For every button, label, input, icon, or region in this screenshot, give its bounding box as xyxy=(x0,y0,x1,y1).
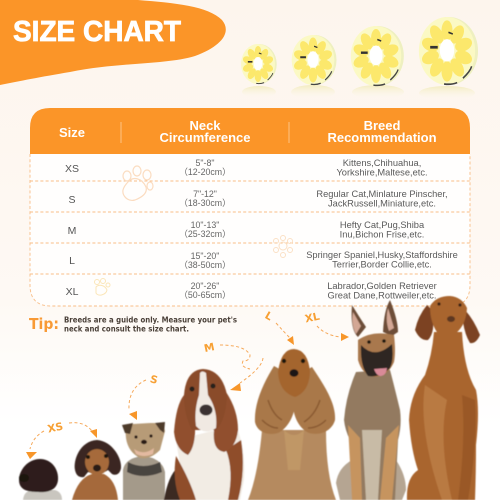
tip note xyxy=(29,315,237,334)
pointer XL xyxy=(304,311,349,341)
row S: Regular Cat,Minlature Pinscher, xyxy=(316,189,448,199)
dog: shepherd XL xyxy=(336,300,406,500)
row XS: （12-20cm） xyxy=(179,167,231,177)
row XL: 20"-26" xyxy=(191,281,219,291)
row M: M xyxy=(68,225,76,237)
pointer M: M xyxy=(203,341,216,355)
collar XS xyxy=(241,44,277,98)
paw watermark small right xyxy=(274,236,292,258)
pointer XL: XL xyxy=(304,311,321,325)
collar M xyxy=(351,26,404,99)
dog: puppy XS tan xyxy=(72,440,121,500)
row S: （18-30cm） xyxy=(179,198,231,208)
pointer XS: XS xyxy=(46,421,64,436)
pointer L: L xyxy=(263,310,275,323)
row XS xyxy=(65,158,428,178)
row XL: Great Dane,Rottweiler,etc. xyxy=(327,290,437,300)
row S: JackRussell,Miniature,etc. xyxy=(328,198,436,208)
title text: SIZE CHART xyxy=(13,16,181,48)
row M: Inu,Bichon Frise,etc. xyxy=(340,230,424,240)
paw watermark small left xyxy=(94,278,110,295)
size table xyxy=(30,108,470,306)
row S: 7"-12" xyxy=(193,189,217,199)
row XS: Kittens,Chihuahua, xyxy=(343,158,421,168)
row XL: （50-65cm） xyxy=(179,290,231,300)
banner: title xyxy=(0,0,226,85)
table header xyxy=(30,108,470,154)
tip label: Tip: xyxy=(29,315,59,333)
row M: （25-32cm） xyxy=(179,229,231,239)
row L: 15"-20" xyxy=(191,251,219,261)
tip body: Breeds are a guide only. Measure your pet's xyxy=(64,316,237,324)
row M: Hefty Cat,Pug,Shiba xyxy=(340,220,424,230)
row XL: XL xyxy=(66,286,79,298)
row L: L xyxy=(69,255,75,267)
header: neck circumference: Circumference xyxy=(159,130,251,145)
paw watermark large xyxy=(123,166,153,200)
pointer XS xyxy=(26,421,97,459)
table body xyxy=(30,154,470,306)
collar S xyxy=(291,35,337,99)
lemon collars: four sizes xyxy=(241,17,478,100)
header: size: Size xyxy=(59,125,85,140)
dog: yorkie S xyxy=(122,422,165,500)
row L xyxy=(69,250,458,270)
header: neck circumference: Neck xyxy=(189,118,221,133)
pointer M xyxy=(203,341,263,391)
row L: （38-50cm） xyxy=(179,260,231,270)
dog: vizsla XL xyxy=(407,296,480,500)
row XS: XS xyxy=(65,163,79,175)
dog: basset M xyxy=(164,369,244,500)
header: breed recommendation: Recommendation xyxy=(327,130,437,145)
row M xyxy=(68,220,425,240)
row L: Springer Spaniel,Husky,Staffordshire xyxy=(306,250,458,260)
row XL xyxy=(66,281,437,300)
row L: Terrier,Border Collie,etc. xyxy=(332,260,432,270)
pointer S xyxy=(129,373,159,420)
row XS: Yorkshire,Maltese,etc. xyxy=(336,168,428,178)
tip body: neck and consult the size chart. xyxy=(64,324,189,334)
tip body xyxy=(64,316,237,334)
row XL: Labrador,Golden Retriever xyxy=(327,281,437,291)
row S xyxy=(68,189,448,208)
row M: 10"-13" xyxy=(191,220,219,230)
row S: S xyxy=(68,194,76,206)
dog: puppy XS xyxy=(19,459,62,500)
collar L xyxy=(419,17,478,100)
header: breed recommendation: Breed xyxy=(364,118,400,133)
pointer S: S xyxy=(149,373,159,387)
row XS: 5"-8" xyxy=(196,158,214,168)
size pointers xyxy=(26,310,349,459)
dog: cocker L xyxy=(248,349,336,500)
pointer L xyxy=(263,310,294,345)
